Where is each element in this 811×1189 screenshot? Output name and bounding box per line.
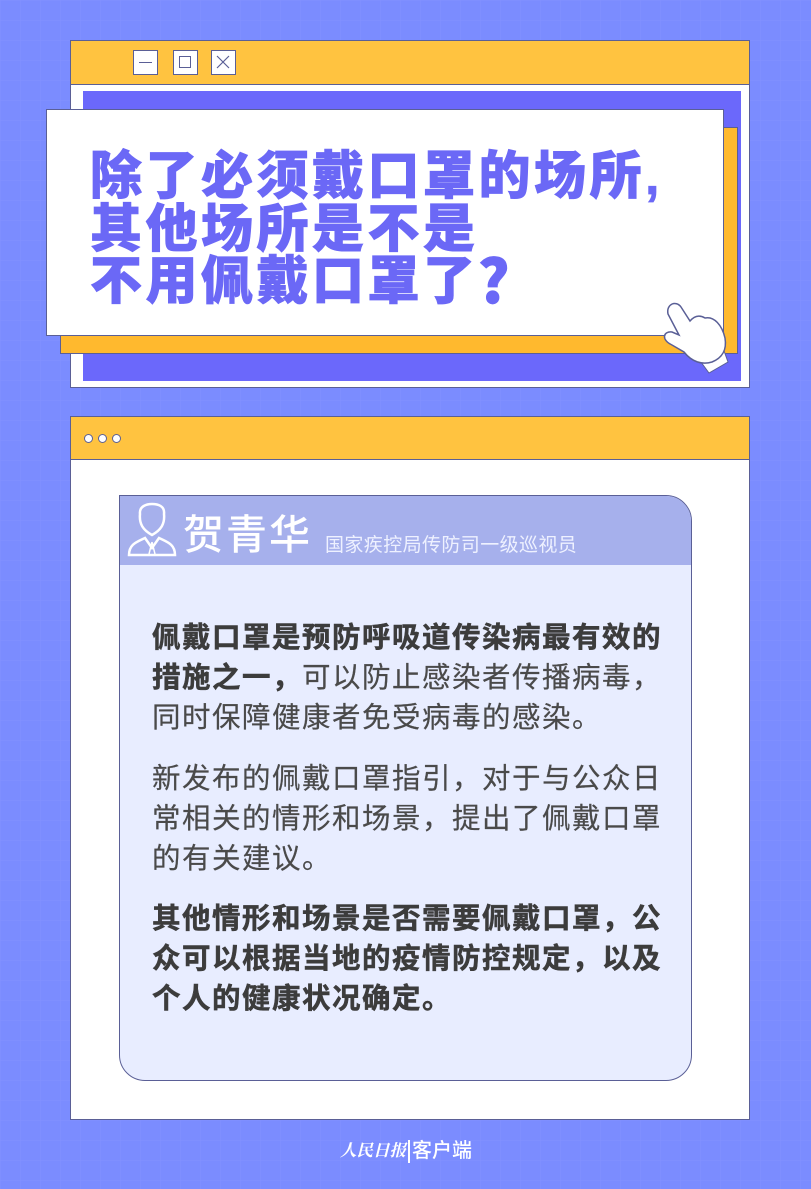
- window dot: [112, 434, 121, 443]
- paragraph 1: 措施之一，可以防止感染者传播病毒，: [152, 662, 662, 694]
- window dot: [98, 434, 107, 443]
- paragraph 3: 其他情形和场景是否需要佩戴口罩，公: [152, 903, 662, 935]
- purple backing panel: [83, 91, 741, 381]
- speaker name: 贺青华: [183, 512, 312, 558]
- paragraph 1: 佩戴口罩是预防呼吸道传染病最有效的: [152, 622, 662, 654]
- paragraph 3: 众可以根据当地的疫情防控规定，以及: [152, 943, 662, 975]
- footer logo: 客户端: [412, 1140, 472, 1162]
- title: 不用佩戴口罩了?: [90, 234, 510, 321]
- panel: expert answer card: [119, 495, 692, 1081]
- paragraph 2: 新发布的佩戴口罩指引，对于与公众日: [152, 763, 662, 795]
- window title bar: [70, 40, 750, 85]
- speaker title: 国家疾控局传防司一级巡视员: [325, 535, 577, 556]
- paragraph 2: [152, 763, 662, 875]
- title: [90, 148, 663, 321]
- paragraph 1: [152, 622, 662, 734]
- speaker header band: [120, 496, 691, 565]
- button: minimize: [133, 50, 158, 75]
- paragraph 1: 同时保障健康者免受病毒的感染。: [152, 702, 602, 734]
- question card: [46, 109, 724, 336]
- title: 除了必须戴口罩的场所,: [90, 148, 663, 206]
- footer logo: 人民日报: [340, 1141, 406, 1160]
- button: maximize: [173, 50, 198, 75]
- paragraph 2: 的有关建议。: [152, 843, 332, 875]
- icon: person: [128, 502, 176, 556]
- title: 其他场所是不是: [90, 201, 479, 259]
- button: close: [211, 50, 236, 75]
- paragraph 3: 个人的健康状况确定。: [152, 983, 452, 1015]
- panel: answer window: [70, 416, 750, 1120]
- paragraph 3: [152, 903, 662, 1015]
- window dot: [84, 434, 93, 443]
- panel: question window: [70, 40, 750, 388]
- paragraph 2: 常相关的情形和场景，提出了佩戴口罩: [152, 803, 662, 835]
- icon: pointing hand: [664, 302, 728, 374]
- orange backing panel: [60, 127, 738, 354]
- answer window title bar: [70, 416, 750, 460]
- footer logo: [340, 1140, 472, 1163]
